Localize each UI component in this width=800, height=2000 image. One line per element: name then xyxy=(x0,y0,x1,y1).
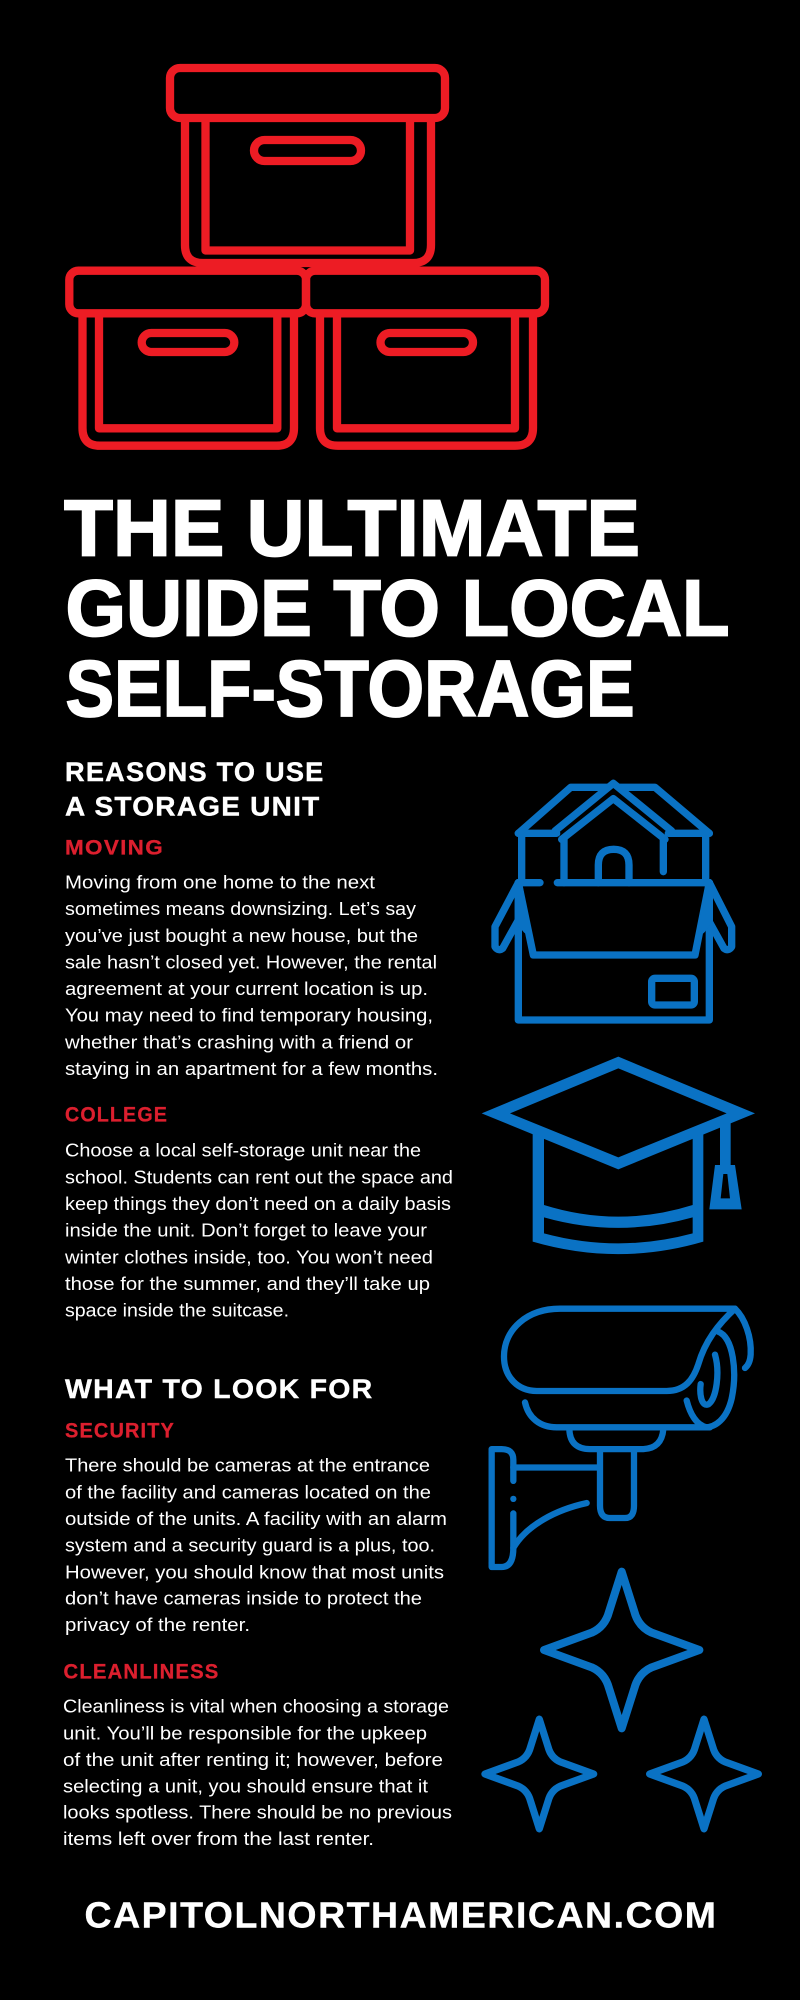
text block: cleanliness: items left over from the last renter. xyxy=(63,1828,374,1849)
text block: security xyxy=(65,1455,447,1635)
text block: college: Choose a local self-storage unit near the xyxy=(65,1140,421,1161)
text block: security: privacy of the renter. xyxy=(65,1614,250,1635)
text block: college xyxy=(64,1140,453,1321)
title: GUIDE TO LOCAL xyxy=(66,564,730,652)
text block: cleanliness: of the unit after renting it; however, before xyxy=(63,1749,443,1770)
title: SELF-STORAGE xyxy=(66,644,634,733)
panel: reasons to use a storage unit xyxy=(64,757,453,1321)
icon: graduation cap xyxy=(482,1057,755,1254)
icon: top box xyxy=(170,68,445,263)
icon: bottom-right box xyxy=(306,271,545,446)
subheading: college: COLLEGE xyxy=(65,1104,168,1127)
text block: security: don’t have cameras inside to protect the xyxy=(65,1587,422,1608)
text block: moving xyxy=(64,871,438,1079)
text block: college: keep things they don’t need on a daily basis xyxy=(65,1193,451,1214)
text block: cleanliness xyxy=(63,1696,452,1849)
heading: what to look for: WHAT TO LOOK FOR xyxy=(65,1374,374,1404)
text block: cleanliness: Cleanliness is vital when choosing a storage xyxy=(63,1696,449,1717)
text block: cleanliness: unit. You’ll be responsible for the upkeep xyxy=(63,1722,427,1743)
text block: college: inside the unit. Don’t forget to leave your xyxy=(65,1220,427,1241)
text block: moving: whether that’s crashing with a friend or xyxy=(64,1031,413,1052)
text block: college: school. Students can rent out the space and xyxy=(65,1166,453,1187)
text block: moving: Moving from one home to the next xyxy=(65,871,376,892)
title: THE ULTIMATE xyxy=(64,484,640,572)
text block: moving: sale hasn’t closed yet. However, the rental xyxy=(65,951,437,972)
text block: security: of the facility and cameras located on the xyxy=(65,1481,431,1502)
heading: reasons to use a storage unit: REASONS TO USE xyxy=(65,757,324,787)
icon: small right sparkle xyxy=(650,1719,758,1829)
text block: moving: you’ve just bought a new house, but the xyxy=(65,925,418,946)
heading: reasons to use a storage unit: A STORAGE UNIT xyxy=(65,791,320,821)
title xyxy=(64,484,730,733)
text block: moving: sometimes means downsizing. Let’s say xyxy=(65,898,417,919)
text block: moving: You may need to find temporary housing, xyxy=(65,1005,433,1026)
icon: house in moving box xyxy=(495,783,732,1020)
text block: cleanliness: looks spotless. There should be no previous xyxy=(63,1802,452,1823)
heading: reasons to use a storage unit xyxy=(65,757,324,821)
text block: college: those for the summer, and they’ll take up xyxy=(65,1273,430,1294)
icon: sparkles xyxy=(485,1572,758,1829)
text block: cleanliness: selecting a unit, you should ensure that it xyxy=(63,1775,429,1796)
panel: what to look for xyxy=(63,1374,452,1849)
icon: stacked storage boxes xyxy=(69,68,545,446)
text block: moving: agreement at your current location is up. xyxy=(65,978,428,999)
footer: website: CAPITOLNORTHAMERICAN.COM xyxy=(84,1895,718,1936)
icon: security camera xyxy=(492,1309,751,1567)
icon: large sparkle xyxy=(544,1572,699,1728)
text block: security: outside of the units. A facility with an alarm xyxy=(65,1508,447,1529)
subheading: moving: MOVING xyxy=(65,836,164,859)
text block: security: There should be cameras at the entrance xyxy=(65,1455,430,1476)
text block: college: winter clothes inside, too. You won’t need xyxy=(64,1246,433,1267)
text block: security: system and a security guard is a plus, too. xyxy=(65,1535,435,1556)
text block: security: However, you should know that most units xyxy=(65,1561,444,1582)
icon: bottom-left box xyxy=(69,271,306,446)
text block: college: space inside the suitcase. xyxy=(65,1300,289,1321)
icon: small left sparkle xyxy=(485,1719,594,1829)
subheading: security: SECURITY xyxy=(65,1420,175,1443)
text block: moving: staying in an apartment for a few months. xyxy=(65,1058,438,1079)
subheading: cleanliness: CLEANLINESS xyxy=(64,1660,220,1683)
